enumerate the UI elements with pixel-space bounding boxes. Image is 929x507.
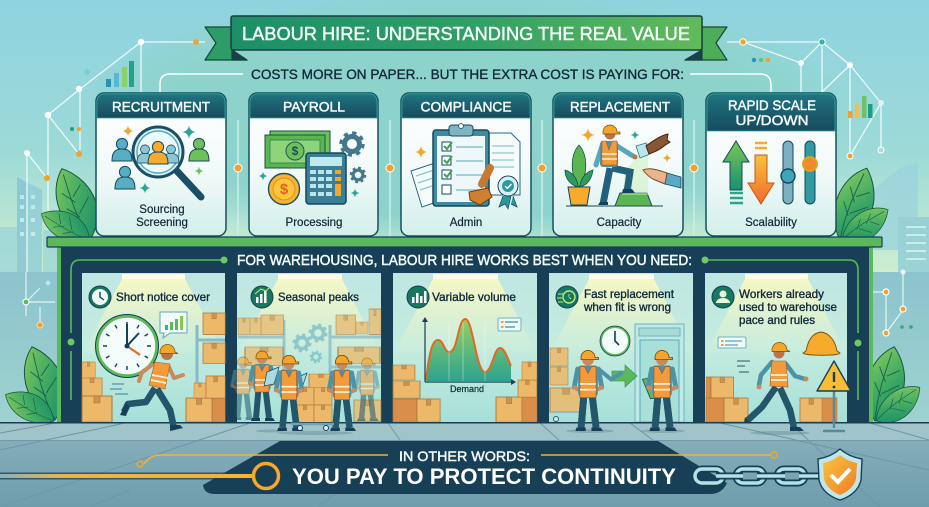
walkers over floor bbox=[157, 350, 845, 431]
recruitment caption: Sourcing bbox=[139, 204, 185, 216]
panel: replacement bbox=[553, 93, 683, 236]
pavement floor bbox=[0, 422, 929, 507]
section heading connectors bbox=[71, 260, 858, 400]
warehouse shelf and boxes bbox=[82, 313, 225, 422]
walking worker bbox=[737, 342, 808, 431]
ground plant right bbox=[854, 342, 929, 430]
shelves, boxes and gears bbox=[238, 309, 381, 422]
fast replacement label: Fast replacement bbox=[584, 287, 675, 301]
wall network left bbox=[23, 272, 55, 328]
short notice label: Short notice cover bbox=[116, 290, 210, 304]
compliance caption: Admin bbox=[450, 217, 482, 229]
rules tag bbox=[718, 337, 746, 348]
cart with boxes bbox=[291, 374, 334, 430]
left skyline buildings bbox=[0, 177, 57, 272]
panel: compliance bbox=[401, 93, 531, 236]
sky background bbox=[0, 0, 929, 272]
title banner bbox=[205, 16, 727, 60]
workers label: Workers already bbox=[739, 287, 824, 301]
icon: worker badge bbox=[712, 286, 734, 308]
section heading: FOR WAREHOUSING, LABOUR HIRE WORKS BEST WHEN YOU NEED: bbox=[237, 253, 692, 269]
arriving worker bbox=[642, 350, 677, 431]
right skyline buildings bbox=[873, 162, 929, 272]
recruitment header bbox=[97, 94, 225, 118]
subtitle connectors bbox=[160, 74, 771, 92]
callout: continuity banner bbox=[0, 441, 777, 494]
clock bbox=[600, 326, 630, 356]
chart bubble bbox=[160, 312, 187, 338]
side wall left bbox=[0, 272, 57, 422]
icon: up and down arrows with sliders bbox=[723, 141, 817, 204]
ground plant left bbox=[0, 343, 70, 434]
window: fast replacement bbox=[549, 273, 693, 431]
arrow to replacement worker bbox=[612, 365, 637, 387]
replacement caption: Capacity bbox=[597, 217, 642, 229]
departing worker bbox=[574, 350, 622, 431]
key message: YOU PAY TO PROTECT CONTINUITY bbox=[292, 464, 676, 489]
replacement heading text: REPLACEMENT bbox=[570, 98, 670, 114]
scale heading line 2: UP/DOWN bbox=[736, 112, 808, 128]
subtitle: COSTS MORE ON PAPER... BUT THE EXTRA COST IS PAYING FOR: bbox=[251, 66, 684, 82]
payroll header bbox=[250, 94, 377, 118]
icon: cash, coin, calculator, gears: $ bbox=[292, 144, 299, 158]
icon: clipboard, stamp, rosette bbox=[411, 124, 520, 209]
scale heading line 1: RAPID SCALE bbox=[728, 97, 816, 113]
window: workers used to rules bbox=[705, 273, 851, 431]
ceiling light bbox=[237, 274, 381, 355]
icon: bars badge bbox=[407, 286, 429, 308]
gold ring bbox=[254, 464, 278, 488]
banner plate bbox=[203, 441, 727, 494]
icon: chain links bbox=[695, 469, 822, 483]
running worker bbox=[110, 344, 183, 434]
variable volume label: Variable volume bbox=[432, 290, 516, 304]
demand tag bbox=[498, 318, 521, 331]
decorative network right bbox=[727, 42, 881, 156]
banner title text: LABOUR HIRE: UNDERSTANDING THE REAL VALUE bbox=[242, 24, 690, 44]
icon: worker stepping up, helping hands, plant bbox=[565, 125, 681, 206]
connector nodes bbox=[68, 256, 862, 346]
boxes bbox=[706, 377, 837, 422]
window: seasonal peaks bbox=[232, 273, 381, 431]
thin line right bbox=[541, 452, 777, 458]
right plant behind cards bbox=[820, 162, 896, 250]
demand chart bbox=[422, 317, 521, 394]
window: variable volume bbox=[393, 273, 537, 422]
side wall right bbox=[873, 272, 929, 422]
ceiling light bbox=[393, 274, 537, 355]
payroll heading text: PAYROLL bbox=[283, 98, 345, 114]
gold rail bbox=[0, 472, 268, 480]
thin line left bbox=[137, 455, 388, 467]
large wall clock bbox=[96, 314, 158, 378]
scale caption: Scalability bbox=[745, 217, 797, 229]
in other words: IN OTHER WORDS: bbox=[399, 448, 530, 464]
background workers bbox=[232, 357, 379, 421]
network nodes left bbox=[24, 39, 199, 181]
compliance heading text: COMPLIANCE bbox=[420, 98, 512, 114]
ceiling light bbox=[82, 274, 225, 355]
compliance header bbox=[402, 94, 530, 118]
exit door bbox=[635, 324, 684, 422]
warning sign bbox=[817, 361, 851, 431]
recruitment caption line 2: Screening bbox=[136, 217, 188, 229]
banner tails bbox=[205, 27, 727, 60]
banner body bbox=[231, 16, 702, 50]
icon: shield with check bbox=[818, 449, 862, 500]
icon: clock badge bbox=[89, 286, 111, 308]
workers label line 2: used to warehouse bbox=[739, 300, 837, 314]
recruitment heading text: RECRUITMENT bbox=[112, 98, 210, 114]
warehouse storefront bbox=[47, 237, 882, 434]
icon: cash, coin, calculator, gears bbox=[259, 131, 365, 204]
payroll caption: Processing bbox=[286, 217, 342, 229]
storefront frame bbox=[57, 247, 873, 423]
mini bar chart left bbox=[106, 61, 134, 87]
window: short notice cover bbox=[82, 273, 225, 434]
icon: cash, coin, calculator, gears: $ bbox=[280, 181, 289, 198]
fast replacement label line 2: when fit is wrong bbox=[583, 300, 671, 314]
mini bar chart right bbox=[848, 96, 872, 118]
centre sky tint bbox=[65, 0, 865, 265]
demand axis label: Demand bbox=[450, 384, 484, 394]
stacked boxes bbox=[393, 362, 537, 422]
green edge stripes bbox=[59, 247, 871, 422]
boxes and cart bbox=[550, 348, 582, 422]
workers label line 3: pace and rules bbox=[739, 313, 815, 327]
scale header bbox=[707, 94, 835, 131]
group of workers bbox=[250, 351, 356, 431]
storefront roof bbox=[47, 237, 882, 247]
seasonal peaks label: Seasonal peaks bbox=[278, 290, 359, 304]
wall network right bbox=[873, 270, 913, 336]
hard hat bbox=[803, 332, 840, 355]
network nodes right bbox=[740, 39, 884, 159]
ceiling light bbox=[705, 274, 847, 355]
replacement header bbox=[554, 94, 682, 118]
ceiling light bbox=[549, 274, 693, 355]
decorative network left bbox=[27, 42, 205, 272]
connectors between cards bbox=[234, 120, 698, 237]
icon: rising chart badge bbox=[251, 286, 273, 308]
panel: recruitment bbox=[96, 93, 226, 236]
feet shadows bbox=[256, 429, 810, 435]
panel: rapid scale bbox=[706, 93, 836, 236]
left plant behind cards bbox=[36, 163, 105, 253]
icon: fast clock badge bbox=[556, 286, 578, 308]
icon: magnifier with candidates bbox=[112, 125, 209, 197]
panel: payroll bbox=[249, 93, 378, 236]
